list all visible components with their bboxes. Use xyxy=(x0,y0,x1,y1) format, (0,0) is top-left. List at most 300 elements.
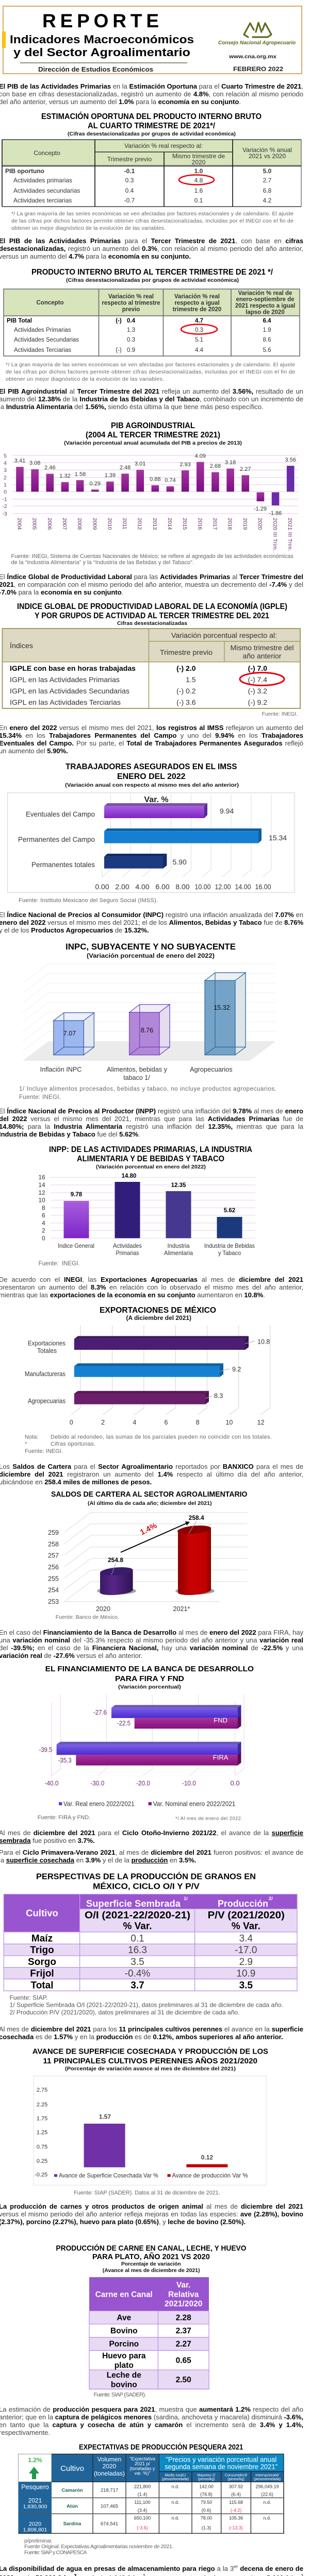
heading xyxy=(45,1665,254,1690)
table: (-) xyxy=(116,318,122,324)
footnote xyxy=(19,1086,276,1100)
table: 1.9 xyxy=(263,327,271,333)
bar chart: 2020 xyxy=(257,518,263,530)
table: 8.6 xyxy=(263,337,271,343)
3D cylinder chart xyxy=(48,1513,248,1613)
3D cylinder chart: 257 xyxy=(48,1552,59,1560)
paragraph: financiamiento: En el caso del Financiamiento de la Banca de Desarrollo al mes de enero del 2022 para FIRA, hay xyxy=(0,1629,303,1636)
footnote xyxy=(6,362,295,382)
panel: saldos de cartera xyxy=(48,1490,248,1620)
table: 0.1 xyxy=(194,197,203,204)
table: Bovino xyxy=(110,2327,138,2335)
table: 2.7 xyxy=(263,177,272,184)
table: 0.4 xyxy=(127,318,136,324)
heading: (Variación porcentual de enero del 2022) xyxy=(87,953,215,959)
bar: manufactureras xyxy=(74,1363,223,1377)
table: (pesos/kg) xyxy=(227,2478,244,2481)
table: Actividades Terciarias xyxy=(14,347,71,353)
callout: growth xyxy=(28,2456,42,2479)
source note xyxy=(11,553,294,566)
table: Camarón xyxy=(61,2488,83,2494)
table: 4.2 xyxy=(263,197,272,204)
paragraph: productividad laboral xyxy=(0,573,303,596)
table: 674,541 xyxy=(101,2521,118,2527)
heading: (Porcentaje de variación avance al mes de diciembre del 2021) xyxy=(65,2065,236,2072)
bars: FND xyxy=(111,1705,241,1728)
callout: growth: 1.2% xyxy=(28,2456,42,2464)
table: (-) 2.0 xyxy=(176,664,196,672)
horizontal bar chart: -39.5 xyxy=(39,1746,52,1754)
horizontal bar chart: -20.0 xyxy=(136,1780,150,1787)
heading: PRODUCCIÓN DE CARNE EN CANAL, LECHE, Y HUEVO xyxy=(56,2243,247,2252)
table: 1/ xyxy=(184,1896,188,1902)
source note: Fuente: SIAP (SADER). Datos al 31 de diciembre de 2021. xyxy=(74,2190,220,2196)
paragraph: carnes xyxy=(0,2202,303,2226)
bar chart: 2005 xyxy=(31,518,38,530)
table: 650,100 xyxy=(134,2516,151,2521)
table: Frijol xyxy=(30,1969,54,1979)
heading: (Variación porcentual) xyxy=(118,1684,181,1690)
table: (1.3) xyxy=(202,2525,211,2530)
heading: PIB AGROINDUSTRIAL xyxy=(111,421,195,430)
table: 3.7 xyxy=(130,1980,144,1991)
bar chart: 3.01 xyxy=(135,461,145,467)
heading: ENERO DEL 2022 xyxy=(117,772,186,781)
report title: REPORTE xyxy=(42,10,159,31)
bar chart: 0 xyxy=(4,489,7,495)
3D column chart: tabaco 1/ xyxy=(123,1074,150,1081)
table: 0.3 xyxy=(125,177,134,184)
table: 1.0 xyxy=(194,167,203,175)
table: enero-septiembre de xyxy=(236,297,295,303)
bar chart: -1 xyxy=(2,497,7,503)
table: Actividades Secundarias xyxy=(14,337,79,343)
table: 1.6 xyxy=(194,187,203,194)
paragraph: INPP xyxy=(0,1107,303,1138)
table: 221,800 xyxy=(134,2484,151,2489)
paragraph: superficie sembrada: sembrada fue positivo en 3.7%. xyxy=(0,1837,95,1844)
bar chart xyxy=(34,2076,266,2185)
table: (0.6) xyxy=(202,2507,211,2513)
table: "Precios y variación porcentual anual xyxy=(166,2456,276,2464)
table: 3.4 xyxy=(239,1933,253,1944)
horizontal bar chart: 10.00 xyxy=(195,883,211,891)
table: (-3.6) xyxy=(137,2525,148,2530)
paragraph: tercer trimestre: versus un aumento del 4.7% para la economía en su conjunto. xyxy=(0,252,191,260)
3D cylinder chart: 253 xyxy=(48,1598,59,1605)
source note: Fuente: INEGI, Sistema de Cuentas Nacionales de México; se refiere al agregado de las actividades económicas xyxy=(11,553,294,560)
table: Medio rural1/ xyxy=(165,2474,186,2478)
table xyxy=(18,2454,284,2533)
paragraph: INPP: Industria de Bebidas y Tabaco fue del 5.62%. xyxy=(0,1130,140,1138)
bar chart xyxy=(2,453,298,551)
horizontal bar chart xyxy=(25,1326,270,1426)
bar chart: y Tabaco xyxy=(218,1249,241,1257)
bar chart: 2021 III Trim. xyxy=(287,518,293,551)
bar chart: 2020 III Trim. xyxy=(272,518,278,551)
table: 111,100 xyxy=(134,2500,151,2505)
bar chart: 3.18 xyxy=(225,460,236,466)
paragraph: saldos de cartera: Los Saldos de Cartera para el Sector Agroalimentario reportados por BANXICO para el mes de xyxy=(0,1463,303,1470)
table: O/I (2021-22/2020-21) xyxy=(85,1910,190,1921)
bar chart: 1.25 xyxy=(37,2130,47,2136)
table xyxy=(4,1894,297,1991)
paragraph: IMSS: un aumento del 5.90%. xyxy=(0,747,68,755)
legend: Avance de Superficie Cosechada Var % xyxy=(59,2172,158,2179)
bar chart: 1.58 xyxy=(75,471,86,478)
bar chart: 2 xyxy=(4,475,7,481)
paragraph: PIB agroindustrial: El PIB Agroindustrial al Tercer Trimestre del 2021 refleja un aumento del 3.56%, resultado de un xyxy=(0,387,303,395)
table: 2.27 xyxy=(176,2340,191,2349)
table: var. %)" xyxy=(134,2471,151,2476)
table: (toneladas y xyxy=(129,2466,155,2471)
table: Var. xyxy=(176,2281,190,2290)
heading xyxy=(66,942,236,959)
footnote: obtener un mejor diagnóstico de la evolución de las variables. xyxy=(6,376,164,382)
paragraph: oportuna: con base en cifras desestacionalizadas, registró un aumento de 4.8%, con relación al mismo periodo xyxy=(0,90,303,98)
table: Variación % real xyxy=(174,294,220,300)
table: Variación porcentual respecto al: xyxy=(171,631,277,639)
table: IGPLE con base en horas trabajadas xyxy=(10,664,136,672)
heading: AVANCE DE SUPERFICIE COSECHADA Y PRODUCCIÓN DE LOS xyxy=(32,2047,268,2056)
bar chart: -1.86 xyxy=(269,510,282,516)
table: Variación % real xyxy=(108,294,154,300)
bar chart: 0.29 xyxy=(90,481,101,487)
heading xyxy=(41,111,262,137)
horizontal bar chart: FND xyxy=(214,1716,227,1724)
3D column chart: Alimentos, bebidas y xyxy=(107,1066,168,1073)
table: previo xyxy=(122,307,140,313)
panel: exportaciones xyxy=(25,1305,272,1454)
source note: Fuente: Instituto Mexicano del Seguro Social (IMSS). xyxy=(19,897,158,904)
table: Atún xyxy=(67,2504,78,2510)
heading: EL FINANCIAMIENTO DE LA BANCA DE DESARROLLO xyxy=(45,1665,254,1673)
heading: (Variación porcentual en enero del 2022) xyxy=(96,1164,206,1170)
bar chart: 3.08 xyxy=(29,460,40,466)
heading: ESTIMACIÓN OPORTUNA DEL PRODUCTO INTERNO BRUTO xyxy=(41,111,262,121)
bar chart: 2015 xyxy=(182,518,188,530)
table xyxy=(4,289,300,356)
bar chart: 2006 xyxy=(46,518,53,530)
website: www.cna.org.mx xyxy=(229,54,276,60)
paragraph: primavera-verano: Para el Ciclo Primavera-Verano 2021, al mes de diciembre del 2021 fueron positivos: el avance de xyxy=(0,1849,303,1856)
subtitle xyxy=(10,33,194,59)
notes: p/preliminar. xyxy=(24,2538,53,2544)
horizontal bar chart: 12 xyxy=(257,1419,265,1426)
table: (-) 7.4 xyxy=(248,675,267,684)
bar chart: 3.41 xyxy=(14,457,25,464)
3D column chart: 7.07 xyxy=(63,1030,76,1037)
heading: (2004 AL TERCER TRIMESTRE 2021) xyxy=(86,431,220,439)
horizontal bar chart: -22.5 xyxy=(117,1719,130,1727)
horizontal bar chart: Manufactureras xyxy=(25,1370,66,1378)
heading: (Avance al mes de diciembre de 2021) xyxy=(103,2267,200,2274)
table: -17.0 xyxy=(235,1945,257,1956)
table: 0.3 xyxy=(127,337,135,343)
bar chart: 2013 xyxy=(152,518,158,530)
bar: permanentes del campo xyxy=(104,828,262,843)
paragraph: IMSS: 15.34% en los Trabajadores Permanentes del Campo y uno del 9.94% en los Trabajadores xyxy=(0,732,303,739)
horizontal bar chart: 4 xyxy=(133,1419,136,1426)
3D column chart: 15.32 xyxy=(214,1004,230,1011)
source note xyxy=(38,1815,242,1822)
table: -0.4% xyxy=(125,1969,150,1979)
bar chart: Industria de Bebidas xyxy=(204,1242,255,1249)
table: 6.8 xyxy=(263,187,272,194)
footnote: de las cifras por dichos factores permite obtener cifras desestacionalizadas, incluidas por el INEGI con el fin de xyxy=(6,369,295,375)
horizontal bar chart: 4.00 xyxy=(135,883,150,891)
3D cylinder chart: 254 xyxy=(48,1587,59,1594)
source note: */ Al mes de enero del 2022. xyxy=(175,1816,242,1822)
3D cylinder chart: 258 xyxy=(48,1540,59,1548)
paragraph: pesca: La estimación de producción pesquera para 2021, muestra que aumentará 1.2% respecto del año xyxy=(0,2405,303,2413)
heading: TRABAJADORES ASEGURADOS EN EL IMSS xyxy=(66,762,237,771)
table: Internacional4/ xyxy=(255,2474,279,2478)
table: Mismo trimestre del xyxy=(230,643,294,652)
heading xyxy=(64,421,242,446)
bar chart: Industria xyxy=(167,1242,190,1249)
bar chart: 3 xyxy=(4,467,7,473)
bar chart: 2.46 xyxy=(44,465,56,471)
table: Sardina xyxy=(63,2521,81,2527)
heading: PARA FIRA Y FND xyxy=(115,1674,184,1683)
horizontal bar chart: FIRA xyxy=(213,1753,229,1761)
paragraph: cultivos perennes: cosechada es de 1.57% y en la producción es de 0.12%, ambos superiores al año anterior. xyxy=(0,2033,283,2041)
footnote: 1/ Incluye alimentos procesados, bebidas y tabaco, no incluye productos agropecuarios. xyxy=(19,1086,276,1092)
bar chart: 2016 xyxy=(197,518,203,530)
horizontal bar chart: Eventuales del Campo xyxy=(26,810,95,818)
table: 296,049.19 xyxy=(255,2484,279,2489)
bar chart: 0.75 xyxy=(37,2144,47,2150)
horizontal bar chart: 5.90 xyxy=(172,858,187,866)
bar chart: 12 xyxy=(38,1189,45,1196)
table: Índices xyxy=(10,641,33,650)
table: Cultivo xyxy=(60,2464,84,2473)
table: (1.4) xyxy=(138,2492,147,2497)
paragraph: saldos de cartera xyxy=(0,1463,303,1486)
table: 0.9 xyxy=(127,347,135,353)
table: año anterior xyxy=(242,652,282,660)
table: 0.4 xyxy=(125,187,134,194)
table: Mismo trimestre de xyxy=(172,152,225,160)
paragraph: financiamiento: variación real de -27.6% versus el año anterior. xyxy=(0,1652,142,1659)
table: n.d. xyxy=(263,2500,271,2505)
heading: INPC, SUBYACENTE Y NO SUBYACENTE xyxy=(66,942,236,952)
table: Variación % anual xyxy=(242,146,292,154)
paragraph: PIB agroindustrial: aumento del 12.38% de la Industria de las Bebidas y del Tabaco, combinado con un incremento de xyxy=(0,395,303,403)
table: n.d. xyxy=(171,2484,180,2489)
table: (-) 0.2 xyxy=(176,687,196,695)
source note: Fuente: FIRA y FND. xyxy=(38,1815,90,1821)
horizontal bar chart: 10.8 xyxy=(257,1338,270,1346)
table: plato xyxy=(115,2361,134,2370)
notes: Nota: xyxy=(25,1434,38,1440)
table: (-) 7.0 xyxy=(248,664,267,672)
table: Cultivo xyxy=(26,1907,58,1918)
bar: eventuales xyxy=(104,803,207,818)
bar chart: 5.62 xyxy=(224,1208,235,1214)
horizontal bar chart: Totales xyxy=(37,1347,57,1354)
table: Trigo xyxy=(30,1945,54,1956)
column: agropecuarios xyxy=(205,973,246,1055)
heading: (Cifras desestacionalizadas por grupos de actividad económica) xyxy=(68,131,236,137)
bar chart: -1.29 xyxy=(254,506,267,512)
table: 107,465 xyxy=(101,2504,118,2510)
3D column chart: Agropecuarios xyxy=(190,1066,233,1073)
bar chart: 2014 xyxy=(167,518,173,530)
heading xyxy=(17,601,287,626)
heading xyxy=(49,1145,252,1170)
table: respecto a igual xyxy=(174,300,220,306)
horizontal bar chart: 6 xyxy=(165,1419,168,1426)
paragraph: financiamiento xyxy=(0,1629,303,1659)
heading: Cifras desestacionalizadas xyxy=(117,620,187,626)
table: 2021 vs 2020 xyxy=(249,152,286,160)
bar chart: 8 xyxy=(42,1205,45,1212)
bar chart: 2.75 xyxy=(37,2087,47,2093)
heading xyxy=(31,268,273,283)
table: -0.1 xyxy=(124,167,135,175)
horizontal bar chart: 8.3 xyxy=(214,1392,223,1399)
paragraph: carnes: (2.37%), porcino (2.27%), huevo para plato (0.65%), y leche de bovino (2.50%). xyxy=(0,2218,246,2226)
panel: estimación oportuna PIB xyxy=(2,111,301,231)
table: 1.3 xyxy=(127,327,135,333)
bar chart: Indice General xyxy=(58,1242,94,1249)
notes: Fuente Original: Expectativas Agroalimentarias noviembre de 2021. xyxy=(24,2544,173,2550)
heading: INDICE GLOBAL DE PRODUCTIVIDAD LABORAL DE LA ECONOMÍA (IGPLE) xyxy=(17,601,287,611)
bar chart: 2.93 xyxy=(180,462,191,468)
paragraph: carnes: La producción de carnes y otros productos de origen animal al mes de diciembre del 2021 xyxy=(0,2202,303,2210)
table: 5.0 xyxy=(263,167,272,175)
panel: PIB agroindustrial chart xyxy=(2,421,298,566)
legend: Avance de producción Var % xyxy=(172,2172,248,2179)
table: 2.37 xyxy=(176,2327,191,2335)
table: Variación % real de xyxy=(238,291,292,297)
table: -0.7 xyxy=(124,197,135,204)
paragraph: oportuna: El PIB de las Actividades Primarias en la Estimación Oportuna para el Cuarto Trimestre de 2021, xyxy=(0,82,303,90)
table: "Expectativa xyxy=(129,2456,155,2462)
panel: perspectivas granos xyxy=(3,1871,298,2016)
paragraph: INPP: El Índice Nacional de Precios al Productor (INPP) registró una inflación del 9.78% al mes de enero xyxy=(0,1107,303,1115)
table: 2021 respecto a igual xyxy=(235,303,295,309)
paragraph: tercer trimestre: desestacionalizadas, registró un aumento del 0.3%, con relación al mismo periodo del año anterior, xyxy=(0,245,303,252)
table: Porcino xyxy=(109,2340,139,2349)
bar chart: 4 xyxy=(4,460,7,466)
horizontal bar chart: -40.0 xyxy=(44,1780,59,1787)
table: 2.28 xyxy=(176,2313,191,2322)
paragraph: INPC: y el de los Productos Agropecuarios de 15.32%. xyxy=(0,926,149,934)
paragraph: pesca: respectivamente. xyxy=(0,2429,50,2436)
bar chart: 5 xyxy=(4,453,7,459)
paragraph: saldos de cartera: diciembre del 2021 registraron un aumento del 1.4% respecto al último día del año anterior, xyxy=(0,1470,303,1478)
panel: pesquera xyxy=(18,2442,284,2555)
table: Carne en Canal xyxy=(95,2290,153,2299)
paragraph: tercer trimestre: El PIB de las Actividades Primarias para el Tercer Trimestre de 2021, con base en cifras xyxy=(0,237,303,245)
bar chart: -2 xyxy=(2,503,7,510)
table: Huevo para xyxy=(102,2352,146,2361)
bar chart: 4.09 xyxy=(195,453,206,460)
source note: Fuente: SIAP (SADER). xyxy=(94,2392,146,2398)
paragraph: pesca xyxy=(0,2405,303,2436)
panel: cultivos perennes chart xyxy=(32,2047,268,2196)
table: 4.4 xyxy=(195,347,204,353)
source note: de la “Industria Alimentaria” y la “Industria de las Bebidas y del Tabaco”. xyxy=(11,560,194,566)
table: Relativa xyxy=(168,2290,199,2299)
paragraph: exportaciones: De acuerdo con el INEGI, las Exportaciones Agropecuarias al mes de diciembre del 2021 xyxy=(0,1276,303,1283)
table: 2020 xyxy=(192,159,206,166)
panel: banca de desarrollo xyxy=(38,1665,254,1822)
arrow xyxy=(121,1521,190,1552)
horizontal bar chart: Exportaciones xyxy=(28,1340,66,1347)
heading xyxy=(100,1305,216,1321)
paragraph: PIB agroindustrial: la Industria Alimentaria del 1.56%, siendo ésta última la que tiene más peso específico. xyxy=(0,403,264,411)
horizontal bar chart: 9.2 xyxy=(232,1366,241,1373)
bar chart: 2010 xyxy=(106,518,112,530)
legend xyxy=(54,2172,248,2179)
panel: IGPLE xyxy=(2,601,301,717)
notes xyxy=(24,2538,173,2555)
date: FEBRERO 2022 xyxy=(233,65,283,73)
notes: Cifras oportunas. xyxy=(51,1441,95,1447)
table: respecto al trimestre xyxy=(102,300,160,306)
table: 2021 p/ xyxy=(135,2461,151,2466)
panel: trabajadores IMSS xyxy=(7,762,295,904)
heading: (Variación anual con respecto al mismo mes del año anterior) xyxy=(65,782,239,788)
table: Concepto xyxy=(34,149,60,157)
notes: * xyxy=(25,1441,27,1447)
table: 2020 xyxy=(29,2521,41,2528)
notes: 1/ Superficie Sembrada O/I (2021-22/2020-21), datos preliminares al 31 de diciembre de cada año. xyxy=(9,2002,283,2009)
3D cylinder chart: 254.8 xyxy=(108,1556,123,1564)
table: 3.5 xyxy=(130,1957,144,1968)
horizontal bar chart: 0 xyxy=(70,1419,73,1426)
bar chart: 2.25 xyxy=(37,2102,47,2108)
heading: Porcentaje de variación xyxy=(121,2261,181,2267)
table: (pesos/tonelada) xyxy=(254,2478,281,2481)
horizontal bar chart: 2.00 xyxy=(115,883,129,891)
table: % Var. xyxy=(123,1921,152,1932)
subtitle: Indicadores Macroeconómicos xyxy=(10,33,194,46)
bar chart: 4 xyxy=(42,1219,45,1227)
heading: PERSPECTIVAS DE LA PRODUCCIÓN DE GRANOS EN xyxy=(36,1871,256,1881)
horizontal bar chart: 0.00 xyxy=(95,883,109,891)
paragraph: INPC: enero del 2022 versus el mismo mes del 2021; el de los Alimentos, Bebidas y Tabaco fue de 8.76% xyxy=(0,919,303,926)
paragraph: primavera-verano: la superficie cosechada en 3.9% y el de la producción en 3.5%. xyxy=(0,1856,196,1864)
heading: EXPORTACIONES DE MÉXICO xyxy=(100,1305,216,1315)
subtitle: y del Sector Agroalimentario xyxy=(13,46,190,59)
legend xyxy=(59,1801,235,1808)
bar chart: Primarias xyxy=(116,1249,139,1257)
heading: (A diciembre del 2021) xyxy=(126,1315,191,1321)
bar chart: 0.12 xyxy=(201,2154,213,2161)
table: 115.68 xyxy=(229,2500,243,2505)
bar chart: 0.25 xyxy=(37,2158,47,2164)
paragraph: oportuna: del año anterior, versus un aumento del 1.0% para la economía en su conjunto. xyxy=(0,98,241,106)
paragraph: productividad laboral: -7.0% para la economía en su conjunto. xyxy=(0,588,123,596)
footnote: Fuente: INEGI. xyxy=(19,1094,61,1100)
table: lapso de 2020 xyxy=(246,309,285,315)
cylinder 2020 xyxy=(97,1566,136,1595)
column: alimentos xyxy=(129,1005,170,1055)
table: (6.4) xyxy=(231,2492,241,2497)
panel: PIB tercer trimestre xyxy=(3,268,300,382)
bar chart: 2019 xyxy=(242,518,248,530)
heading: (Cifras desestacionalizadas por grupos de actividad económica) xyxy=(66,277,239,283)
paragraph: tercer trimestre xyxy=(0,237,303,260)
source note: Fuente: INEGI. xyxy=(39,1261,80,1267)
table: (22.6) xyxy=(261,2492,273,2497)
table: Superficie Sembrada xyxy=(86,1898,181,1909)
